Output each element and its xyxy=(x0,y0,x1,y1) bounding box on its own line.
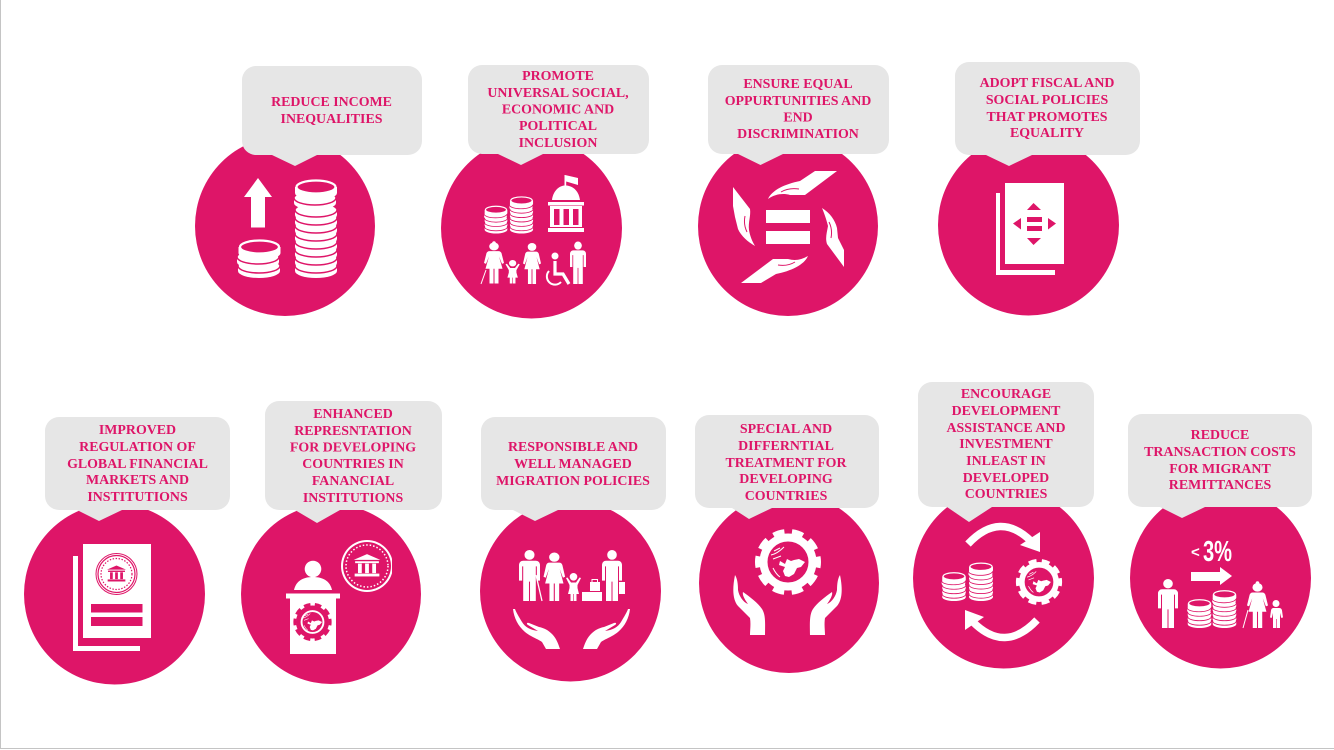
panel: development assistance and investment xyxy=(913,382,1094,668)
panel: migration policies xyxy=(480,417,666,682)
callout bubble xyxy=(45,417,230,521)
badge circle xyxy=(195,136,375,316)
icon: coins and up arrow xyxy=(237,178,337,278)
icon: remittance under three percent xyxy=(1158,536,1283,628)
callout text: DISCRIMINATION xyxy=(737,127,859,142)
callout text: THAT PROMOTES xyxy=(986,110,1108,125)
icon: regulation document with seal xyxy=(73,544,151,651)
icon: gear globe in hands xyxy=(733,532,842,635)
callout text: TRANSACTION COSTS xyxy=(1144,445,1296,460)
badge circle xyxy=(698,136,878,316)
callout bubble xyxy=(242,66,422,166)
panel: reduce income inequalities xyxy=(195,66,422,316)
callout bubble xyxy=(708,65,889,165)
callout text: GLOBAL FINANCIAL xyxy=(67,457,208,472)
icon: speaker at podium with seal xyxy=(286,540,393,654)
callout text: REPRESNTATION xyxy=(294,424,412,439)
callout text: INSTITUTIONS xyxy=(87,490,188,505)
badge circle xyxy=(699,493,879,673)
callout bubble xyxy=(695,415,879,519)
callout text: COUNTRIES xyxy=(745,489,828,504)
callout text: DEVELOPMENT xyxy=(952,404,1061,419)
panel: promote universal inclusion xyxy=(441,65,649,318)
callout text: COUNTRIES xyxy=(965,487,1048,502)
icon: hands around equals sign xyxy=(733,171,844,283)
callout text: ASSISTANCE AND xyxy=(946,421,1066,436)
callout text: DEVELOPING xyxy=(739,472,833,487)
badge circle xyxy=(441,138,622,318)
icon: coins and gear exchange cycle xyxy=(942,526,1060,638)
callout text: EQUALITY xyxy=(1010,126,1084,141)
callout text: UNIVERSAL SOCIAL, xyxy=(487,86,629,101)
callout text: SOCIAL POLICIES xyxy=(986,93,1108,108)
callout text: RESPONSIBLE AND xyxy=(508,440,638,455)
callout bubble xyxy=(955,62,1140,166)
callout text: OPPURTUNITIES AND xyxy=(725,94,871,109)
callout text: INCLUSION xyxy=(519,136,597,151)
callout text: INLEAST IN xyxy=(966,454,1046,469)
callout text: ENCOURAGE xyxy=(961,387,1051,402)
callout text: FOR MIGRANT xyxy=(1169,462,1271,477)
callout bubble xyxy=(918,382,1094,522)
callout text: REDUCE INCOME xyxy=(271,95,392,110)
callout text: FOR DEVELOPING xyxy=(290,440,416,456)
label: under 3 percent: 3% xyxy=(1203,536,1232,568)
callout text: END xyxy=(783,110,813,126)
panel: equal opportunities xyxy=(698,65,889,316)
callout bubble xyxy=(468,65,649,165)
callout text: MARKETS AND xyxy=(86,473,189,488)
callout text: PROMOTE xyxy=(522,69,594,84)
callout text: MIGRATION POLICIES xyxy=(496,474,650,489)
badge circle xyxy=(24,504,205,684)
callout text: ECONOMIC AND xyxy=(502,102,614,118)
badge circle xyxy=(938,134,1119,316)
panel: regulation of financial markets xyxy=(24,417,230,684)
callout text: INVESTMENT xyxy=(959,437,1053,452)
callout text: SPECIAL AND xyxy=(740,422,832,437)
callout text: IMPROVED xyxy=(99,423,176,438)
callout bubble xyxy=(481,417,666,521)
callout text: DEVELOPED xyxy=(963,471,1049,486)
callout text: FANANCIAL xyxy=(312,474,394,489)
panel: enhanced representation xyxy=(241,401,442,684)
label: under 3 percent: < xyxy=(1191,544,1200,561)
panel: migrant remittance costs xyxy=(1128,414,1312,668)
callout text: INSTITUTIONS xyxy=(303,491,403,506)
callout text: WELL MANAGED xyxy=(514,457,632,472)
callout text: REDUCE xyxy=(1191,428,1249,443)
callout bubble xyxy=(1128,414,1312,518)
callout text: DIFFERNTIAL xyxy=(738,439,834,454)
panel: fiscal and social policies xyxy=(938,62,1140,316)
badge circle xyxy=(480,500,661,682)
callout text: INEQUALITIES xyxy=(281,112,383,127)
icon: coins, government building and people xyxy=(481,175,586,285)
callout text: REGULATION OF xyxy=(79,440,196,455)
callout text: ENHANCED xyxy=(313,407,393,422)
callout text: ADOPT FISCAL AND xyxy=(980,76,1114,91)
callout text: POLITICAL xyxy=(519,119,597,134)
callout text: ENSURE EQUAL xyxy=(743,77,853,92)
icon: migrant family in hands xyxy=(513,550,630,649)
callout text: TREATMENT FOR xyxy=(725,456,847,471)
badge circle xyxy=(1130,488,1311,668)
callout text: COUNTRIES IN xyxy=(302,457,404,472)
callout text: REMITTANCES xyxy=(1169,478,1271,493)
panel: special and differential treatment xyxy=(695,415,879,673)
badge circle xyxy=(241,504,421,684)
callout bubble xyxy=(265,401,442,523)
badge circle xyxy=(913,488,1094,668)
icon: policy document xyxy=(996,183,1064,275)
